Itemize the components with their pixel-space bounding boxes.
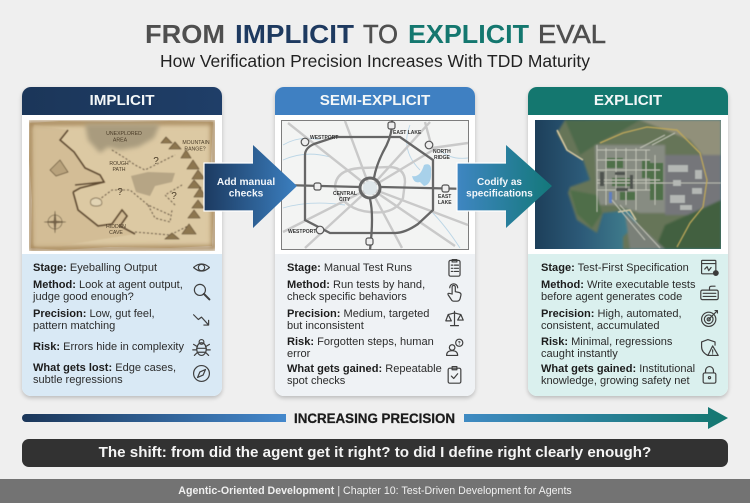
treasure map illustration: UNEXPLORED xyxy=(106,131,142,137)
method: Method: Run tests by hand, xyxy=(287,279,425,291)
method: check specific behaviors xyxy=(287,291,407,303)
icon: shield warning xyxy=(701,339,719,356)
stage: Stage: Manual Test Runs xyxy=(287,262,412,274)
treasure map illustration: PATH xyxy=(112,167,126,173)
risk: Risk: Forgotten steps, human xyxy=(287,336,434,348)
heading: implicit xyxy=(22,87,222,115)
info panel: semi-explicit xyxy=(275,254,475,396)
road map illustration: RIDGE xyxy=(434,155,450,161)
road map illustration: CENTRAL xyxy=(333,191,357,197)
what gets lost: subtle regressions xyxy=(33,374,123,386)
road map illustration: LAKE xyxy=(438,200,452,206)
arrow: add manual checks: checks xyxy=(229,188,264,200)
arrow: codify as specifications: Codify as xyxy=(477,177,522,188)
road map illustration: WESTPORT xyxy=(310,135,338,141)
risk: Risk: Minimal, regressions xyxy=(541,336,672,348)
heading: explicit xyxy=(528,87,728,115)
icon: magnifier xyxy=(194,284,210,300)
risk xyxy=(541,336,672,360)
precision: pattern matching xyxy=(33,320,115,332)
heading: implicit: IMPLICIT xyxy=(90,92,154,109)
risk: Risk: Errors hide in complexity xyxy=(33,341,184,353)
what gets lost xyxy=(33,362,176,386)
icon: bug xyxy=(192,339,211,356)
icon: keyboard xyxy=(700,286,719,300)
footer xyxy=(0,479,750,503)
treasure map illustration: RANGE? xyxy=(184,146,206,152)
takeaway banner: The shift: from did the agent get it right? to did I define right clearly enough? xyxy=(99,444,651,461)
what gets gained: What gets gained: Institutional xyxy=(541,363,695,375)
what gets lost: What gets lost: Edge cases, xyxy=(33,362,176,374)
method: Method: Write executable tests xyxy=(541,279,696,291)
treasure map illustration: ? xyxy=(153,156,159,167)
treasure map illustration: ? xyxy=(171,191,177,202)
heading: explicit: EXPLICIT xyxy=(594,92,662,109)
title: IMPLICIT xyxy=(235,19,354,49)
what gets gained: knowledge, growing safety net xyxy=(541,375,690,387)
precision xyxy=(287,308,429,332)
arrow: codify as specifications: specifications xyxy=(466,188,533,200)
icon: scales xyxy=(445,310,464,326)
title: EXPLICIT xyxy=(408,19,529,49)
heading: semi-explicit xyxy=(275,87,475,115)
title xyxy=(145,19,606,71)
panel: implicit xyxy=(22,87,222,396)
what gets gained xyxy=(287,363,442,387)
road map illustration: EAST LAKE xyxy=(393,130,422,136)
road map illustration: NORTH xyxy=(433,149,451,155)
icon: trending down xyxy=(193,314,210,326)
panel: explicit xyxy=(528,87,728,396)
icon: person with question xyxy=(446,338,464,356)
risk xyxy=(287,336,434,360)
treasure map illustration: ROUGH xyxy=(109,161,129,167)
road map illustration: WESTPORT xyxy=(288,229,316,235)
precision: consistent, accumulated xyxy=(541,320,660,332)
method: Method: Look at agent output, xyxy=(33,279,183,291)
road map illustration: EAST xyxy=(438,194,451,200)
icon: checklist xyxy=(448,259,461,277)
arrow: add manual checks: Add manual xyxy=(217,177,275,188)
arrow: codify as specifications xyxy=(456,145,552,228)
method: judge good enough? xyxy=(33,291,134,303)
title: EVAL xyxy=(538,19,606,49)
icon: eye xyxy=(193,263,210,272)
footer: Agentic-Oriented Development | Chapter 10: Test-Driven Development for Agents xyxy=(178,485,572,497)
road map illustration: CITY xyxy=(339,197,351,203)
icon: padlock xyxy=(702,366,716,384)
treasure map illustration: AREA xyxy=(113,138,128,144)
treasure map illustration: CAVE xyxy=(109,230,123,236)
info panel: explicit xyxy=(528,254,728,396)
what gets gained xyxy=(541,363,695,387)
precision xyxy=(33,308,155,332)
icon: compass xyxy=(193,365,210,382)
title: TO xyxy=(363,19,398,49)
title: FROM xyxy=(145,19,225,49)
arrow: add manual checks xyxy=(203,145,297,228)
icon: code window with gear xyxy=(701,260,719,276)
treasure map illustration xyxy=(29,120,215,251)
increasing precision arrow: INCREASING PRECISION xyxy=(294,411,455,426)
road map illustration xyxy=(281,120,469,250)
what gets gained: What gets gained: Repeatable xyxy=(287,363,442,375)
icon: target xyxy=(701,310,718,327)
method xyxy=(32,279,183,303)
precision: but inconsistent xyxy=(287,320,364,332)
heading: semi-explicit: SEMI-EXPLICIT xyxy=(320,92,430,109)
precision: Precision: Low, gut feel, xyxy=(33,308,155,320)
treasure map illustration: ? xyxy=(117,187,123,198)
satellite map illustration xyxy=(535,120,721,249)
takeaway banner xyxy=(22,439,728,467)
increasing precision arrow xyxy=(22,407,728,429)
precision: Precision: Medium, targeted xyxy=(287,308,429,320)
what gets gained: spot checks xyxy=(287,375,345,387)
treasure map illustration: HIDDEN xyxy=(106,224,126,230)
icon: clipboard check xyxy=(448,366,462,384)
precision xyxy=(541,308,682,332)
treasure map illustration: MOUNTAIN xyxy=(182,140,210,146)
risk: error xyxy=(287,348,310,360)
method: before agent generates code xyxy=(541,291,682,303)
stage: Stage: Eyeballing Output xyxy=(33,262,157,274)
stage: Stage: Test-First Specification xyxy=(541,262,689,274)
method xyxy=(541,279,696,303)
method xyxy=(287,279,425,303)
risk: caught instantly xyxy=(541,348,618,360)
panel: semi-explicit xyxy=(275,87,475,396)
precision: Precision: High, automated, xyxy=(541,308,682,320)
icon: pointing hand xyxy=(447,283,462,302)
info panel: implicit xyxy=(22,254,222,396)
title: How Verification Precision Increases With TDD Maturity xyxy=(160,51,590,71)
